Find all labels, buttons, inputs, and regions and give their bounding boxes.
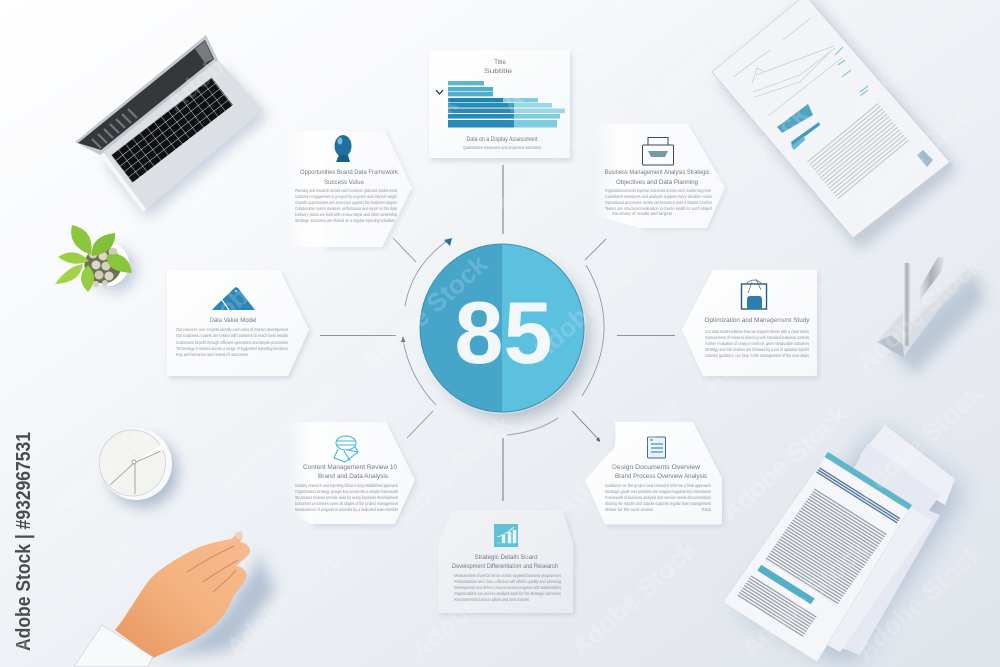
- arrowheads on arcs: [401, 238, 452, 342]
- text block: Organizational tools improve outcomes across each market segment: [605, 188, 712, 193]
- icon: printer box: [642, 138, 674, 165]
- panel: top-left hexagon: [285, 131, 414, 249]
- text block: Collaborative teams measure performance and report on the data: [295, 206, 397, 211]
- pens on folded paper: [877, 257, 985, 375]
- icon: growth chart tile: [494, 524, 518, 547]
- chart title: Subtitle: [484, 68, 513, 75]
- connector lines: [320, 165, 675, 501]
- repeating watermarks: Adobe Stock: [355, 249, 493, 378]
- dark header stripes: [816, 468, 900, 523]
- icon: framed package: [742, 279, 766, 309]
- text block: [605, 188, 713, 216]
- heading: Business Management Analysis Strategic: [604, 169, 710, 176]
- repeating watermarks: Adobe Stock: [735, 534, 873, 663]
- sheet text lines: [737, 487, 887, 642]
- heading: Opportunities Brand Data Framework: [300, 169, 399, 176]
- sheet contents aligned to the sheet: [730, 452, 912, 644]
- arcs around the central circle: [403, 241, 604, 435]
- panel: bottom hexagon card: [438, 510, 575, 615]
- text block: Structured reviews provide data for every business development: [295, 495, 399, 500]
- heading: Strategic Details Board: [474, 554, 538, 561]
- repeating watermarks: Adobe Stock: [490, 94, 628, 223]
- text block: Key performance and research outcomes: [176, 352, 249, 357]
- central score circle: [418, 242, 590, 419]
- heading: Design Documents Overview: [612, 464, 700, 471]
- repeating watermarks: Adobe Stock: [325, 89, 463, 218]
- document chart: [733, 18, 842, 116]
- text block: Our business models are tested with partners to reach best results: [176, 333, 289, 338]
- panel: top bar chart card: [429, 50, 572, 161]
- text block: Guidance on the project and research informs a final approach: [605, 483, 711, 488]
- text block: Strategic outcomes are shared on a regular reporting schedule: [295, 218, 395, 223]
- text block: Operational processes review performance over a shared timeline: [605, 200, 712, 205]
- text block: Industry guidance can help in the management of the next steps: [705, 353, 810, 358]
- plant: [55, 225, 136, 292]
- text block: [176, 327, 289, 357]
- repeating watermarks: Adobe Stock: [850, 537, 988, 666]
- text block: Organization strategy groups key areas into a simple framework: [295, 489, 399, 494]
- stock watermark id: Adobe Stock | #932967531: [13, 432, 35, 651]
- big number: 85: [455, 283, 552, 382]
- heading: [604, 169, 710, 186]
- document side marks: [835, 47, 868, 96]
- text block: [705, 329, 810, 358]
- text block: Development and delivery teams review progress with stakeholders: [454, 585, 562, 590]
- icon: teal line illustration: [334, 436, 358, 462]
- repeating watermarks: Adobe Stock: [850, 379, 988, 508]
- text block: Our data model outlines how we support clients with a clear vision: [705, 329, 809, 334]
- text block: Document processes cover all stages of the project management: [295, 501, 399, 506]
- repeating watermarks: Adobe Stock: [45, 394, 183, 523]
- repeating watermarks: Adobe Stock: [850, 249, 988, 378]
- text block: Measurement of progress is recorded by a dedicated team member: [295, 507, 398, 512]
- text block: Improvement of resource planning with standard business controls: [705, 335, 810, 340]
- panel: left hexagon: [167, 270, 311, 379]
- text block: [295, 188, 398, 223]
- chart caption: [463, 136, 542, 150]
- text block: Growth opportunities are assessed against the business targets: [295, 200, 398, 205]
- document: report with chart: [712, 0, 958, 250]
- text block: Recommended action plans and next reports: [454, 597, 530, 602]
- text block: Industry research and reporting follow a long established approach: [295, 483, 398, 488]
- repeating watermarks: Adobe Stock: [210, 374, 348, 503]
- text block: Framework of business analysis and service needs documentation: [605, 495, 711, 500]
- repeating watermarks: Adobe Stock: [220, 534, 358, 663]
- text block: [454, 573, 562, 602]
- repeating watermarks: Adobe Stock: [5, 534, 143, 663]
- panel: bottom-right hexagon: [585, 422, 724, 527]
- bar chart: [448, 81, 565, 128]
- text block: Notes for the next review: [605, 507, 654, 512]
- text block: Further evaluation of analysis methods gives measurable outcomes: [705, 341, 810, 346]
- text block: Strategy and risk reviews are followed by a set of updated reports: [705, 347, 810, 352]
- repeating watermarks: Adobe Stock: [565, 534, 703, 663]
- repeating watermarks: Adobe Stock: [695, 269, 833, 398]
- text block: Technology is shared across a range of supported reporting functions: [176, 346, 289, 351]
- text block: Total: [701, 507, 711, 512]
- text block: Strategic goals and priorities are mapped against key milestones: [605, 489, 712, 494]
- chart title: Title: [494, 59, 506, 66]
- repeating watermarks: Adobe Stock: [160, 99, 298, 228]
- repeating watermarks: Adobe Stock: [380, 409, 518, 538]
- panel: bottom-left hexagon: [288, 422, 417, 527]
- heading: Data Value Model: [210, 317, 256, 324]
- arrow: bottom-right connector: [572, 411, 600, 442]
- icon: check mark: [436, 90, 443, 94]
- hand with shirt cuff: [74, 531, 275, 666]
- repeating watermarks: Adobe Stock: [185, 219, 323, 348]
- heading: [303, 464, 397, 480]
- heading: [612, 464, 707, 480]
- text block: Teams use structured evaluation to check results for each project: [605, 206, 713, 211]
- heading: [452, 554, 558, 570]
- stack of papers: [723, 425, 965, 665]
- text block: Delivery plans are built with review steps and clear ownership: [295, 212, 397, 217]
- repeating watermarks: Adobe Stock: [525, 239, 663, 368]
- heading: Success Value: [324, 179, 364, 186]
- chart title: [484, 59, 513, 75]
- teal header band: [825, 452, 912, 510]
- text block: Customer engagement is grouped by segment and channel insight: [295, 194, 398, 199]
- text block: Summary of results and targets: [612, 211, 673, 216]
- teal lower band: [757, 565, 815, 604]
- icon: document list: [648, 437, 666, 458]
- chart caption: Data on a Display Assessment: [466, 136, 538, 143]
- repeating watermarks: Adobe Stock: [850, 89, 988, 218]
- icon: mountain triangle: [212, 287, 255, 310]
- heading: Content Management Review 10: [303, 464, 397, 471]
- shirt cuff: [74, 625, 153, 666]
- heading: Objectives and Data Planning: [616, 179, 698, 186]
- pen two: [917, 257, 945, 307]
- text block: [295, 483, 399, 512]
- repeating watermarks: Adobe Stock: [405, 537, 543, 666]
- document highlight block: [777, 104, 820, 150]
- text block: Organizations can access analysis tools for the strategic outcomes: [454, 591, 562, 596]
- text block: Customers benefit through efficient operations and simple processes: [176, 340, 289, 345]
- panel: right hexagon: [682, 270, 819, 379]
- heading: Brand Process Overview Analysis: [615, 473, 707, 480]
- clock: [100, 428, 178, 507]
- text block: [605, 483, 712, 512]
- icon: light bulb: [334, 135, 352, 162]
- document body lines: [806, 102, 910, 200]
- pen one: [903, 263, 910, 346]
- text block: Consistent measures and analysis support every decision made: [605, 194, 712, 199]
- document footer tile: [917, 150, 933, 167]
- front sheet: [723, 452, 912, 662]
- heading: Development Differentiation and Research: [452, 563, 558, 570]
- laptop: [75, 35, 268, 218]
- panel: top-right hexagon: [595, 124, 727, 230]
- text block: Measurement of performance across targeted business programmes: [454, 573, 562, 578]
- heading: [300, 169, 399, 186]
- text block: Planning and research across each business goal and market need: [295, 188, 397, 193]
- text block: Our research and insights identify each area of market development: [176, 327, 289, 332]
- repeating watermarks: Adobe Stock: [675, 99, 813, 228]
- heading: Brand and Data Analysis: [318, 473, 388, 480]
- chart caption: Quantitative measures and projected outcomes: [463, 145, 542, 150]
- text block: Sharing the reports and outputs supports regular team management: [605, 501, 712, 506]
- heading: Optimization and Management Study: [704, 317, 810, 324]
- text block: Presentations and data collected will inform quality and planning: [454, 579, 561, 584]
- repeating watermarks: Adobe Stock: [550, 394, 688, 523]
- repeating watermarks: Adobe Stock: [715, 399, 853, 528]
